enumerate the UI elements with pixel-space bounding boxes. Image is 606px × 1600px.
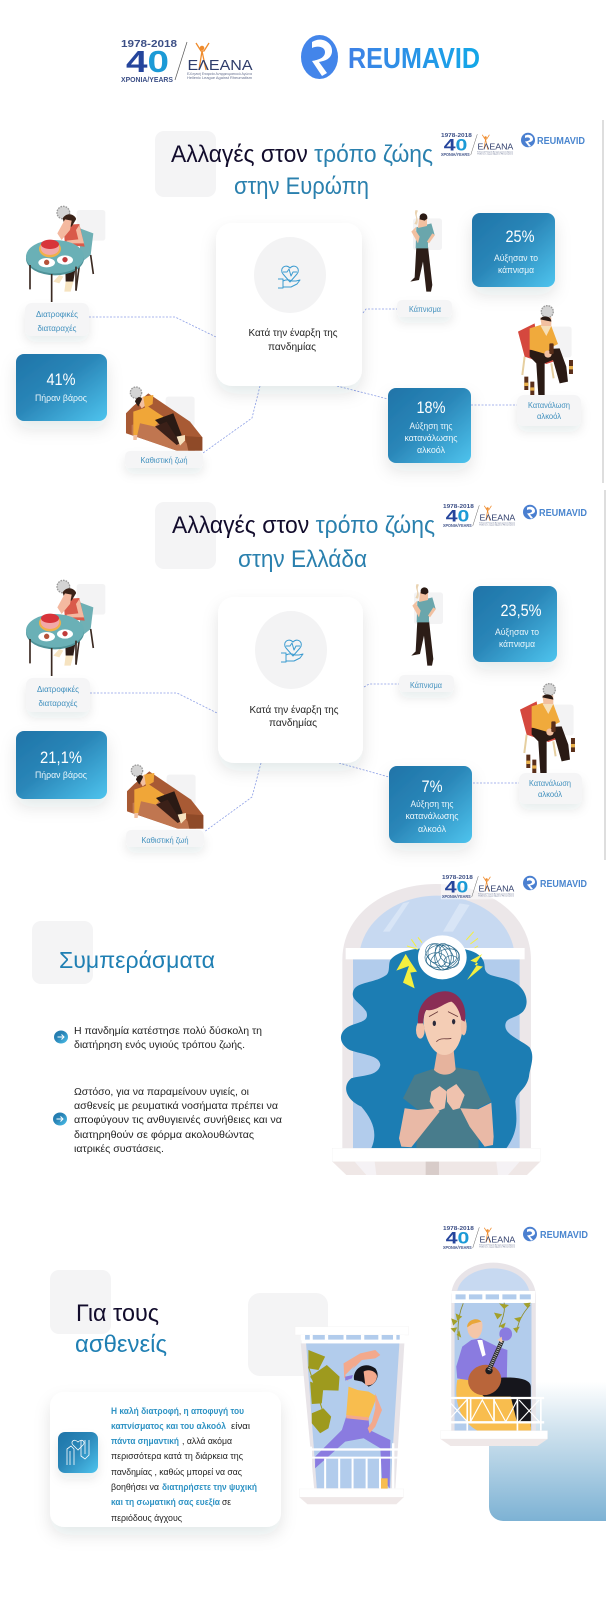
central card — [218, 597, 363, 763]
label: sedentary life: Καθιστική ζωή — [140, 456, 188, 465]
connector lines — [90, 684, 519, 832]
heading: for patients: Για τους — [76, 1300, 159, 1327]
stat: 18% more alcohol: Αύξηση της — [410, 421, 453, 431]
advice card: είναι — [231, 1421, 250, 1431]
label: sedentary life — [125, 451, 203, 468]
logo: REUMAVID small — [523, 876, 587, 890]
stat: 25% more smoking: 25% — [506, 227, 534, 246]
stat: 7% more alcohol: 7% — [422, 777, 442, 796]
label: smoking: Κάπνισμα — [409, 305, 441, 314]
icon: arrow bullet — [53, 1112, 67, 1126]
figure: man smoking — [411, 584, 443, 666]
connector lines — [89, 309, 517, 453]
illustration: woman exercising on balcony — [295, 1327, 409, 1504]
bullet two: Ωστόσο, για να παραμείνουν υγιείς, οι — [74, 1086, 250, 1098]
logo: ELEANA 40 years (header): ΧΡΟΝΙΑ/YEARS — [121, 75, 173, 84]
logo: ELEANA small — [441, 133, 514, 157]
stat: 21,1% gained weight: Πήραν βάρος — [35, 770, 88, 780]
central card — [216, 223, 362, 386]
heading: Greece title: Αλλαγές στον τρόπο ζώης — [172, 512, 435, 539]
stat: 7% more alcohol: κατανάλωσης — [406, 811, 459, 821]
logo: ELEANA small: Hellenic League Against Rheumatism — [479, 524, 516, 527]
logo: ELEANA small: Ελληνική Εταιρεία Αντιρρευματικού Αγώνα — [478, 892, 514, 895]
label: alcohol consumption — [517, 395, 581, 426]
advice card: Η καλή διατροφή, η αποφυγή του — [111, 1406, 244, 1416]
logo: ELEANA small: 1978-2018 — [442, 875, 473, 881]
bullet two: ασθενείς με ρευματικά νοσήματα πρέπει να — [74, 1100, 278, 1112]
logo: REUMAVID (header): REUMAVID — [348, 43, 480, 75]
logo: ELEANA small: Ελληνική Εταιρεία Αντιρρευματικού Αγώνα — [479, 521, 515, 524]
illustration: man playing guitar on balcony — [441, 1263, 548, 1446]
stat: 23,5% more smoking: κάπνισμα — [499, 639, 535, 649]
logo: ELEANA 40 years (header): Hellenic League Against Rheumatism — [187, 76, 252, 80]
icon: hands with heart — [58, 1432, 98, 1473]
label: alcohol consumption: αλκοόλ — [538, 790, 562, 799]
illustration: stressed man in window — [332, 884, 540, 1175]
icon: hand holding heart — [281, 640, 303, 662]
label: smoking — [397, 300, 452, 317]
stat: 41% gained weight: 41% — [46, 370, 76, 389]
panel: conclusions — [32, 873, 587, 1175]
label: dietary disturbances: διαταραχές — [38, 699, 78, 708]
label: alcohol consumption: Κατανάλωση — [529, 779, 571, 788]
stat: 18% more alcohol: κατανάλωσης — [404, 433, 458, 443]
label: dietary disturbances — [26, 678, 90, 712]
logo: REUMAVID (header) — [301, 35, 480, 79]
logo: ELEANA small: Ελληνική Εταιρεία Αντιρρευματικού Αγώνα — [477, 150, 513, 153]
label: smoking: Κάπνισμα — [410, 681, 442, 690]
figure: woman eating at table — [26, 206, 105, 302]
heading: for patients: ασθενείς — [75, 1331, 167, 1358]
label: alcohol consumption — [519, 773, 582, 804]
bullet one: διατήρηση ενός υγιούς τρόπου ζωής. — [74, 1039, 245, 1051]
advice card — [50, 1392, 281, 1527]
label: dietary disturbances — [25, 303, 89, 336]
advice card: περισσότερα κατά τη διάρκεια της — [111, 1451, 243, 1461]
figure: woman eating at table — [26, 580, 105, 676]
central card: Κατά την έναρξη της — [248, 327, 338, 339]
logo: ELEANA 40 years (header): 40 — [126, 44, 169, 79]
label: dietary disturbances: Διατροφικές — [36, 310, 78, 319]
figure: man on sofa — [127, 765, 203, 829]
logo: REUMAVID small: REUMAVID — [537, 136, 585, 147]
logo: ELEANA small: 40 — [446, 1229, 469, 1248]
logo: ELEANA small: 40 — [444, 136, 467, 155]
beanbag — [456, 1367, 531, 1431]
logo: ELEANA 40 years (header) — [121, 39, 252, 84]
heading: for patients — [50, 1270, 167, 1358]
stat: 7% more alcohol: Αύξηση της — [410, 799, 454, 809]
logo: ELEANA small: ΧΡΟΝΙΑ/YEARS — [442, 894, 471, 899]
railing — [300, 1443, 404, 1489]
panel: Europe — [16, 131, 585, 468]
stat: 25% more smoking: Αύξησαν το — [494, 253, 538, 263]
label: sedentary life — [126, 830, 204, 847]
advice card: , αλλά ακόμα — [182, 1436, 232, 1446]
logo: REUMAVID small — [521, 133, 585, 147]
logo: ELEANA small: ΕΛΕΑΝΑ — [479, 885, 515, 894]
stat: 18% more alcohol: αλκοόλ — [417, 445, 445, 455]
icon: hand holding heart — [278, 266, 300, 288]
label: dietary disturbances: Διατροφικές — [37, 685, 79, 694]
logo: REUMAVID small: REUMAVID — [540, 1230, 588, 1241]
logo: ELEANA 40 years (header): Ελληνική Εταιρεία Αντιρρευματικού Αγώνα — [187, 72, 252, 76]
logo: ELEANA small: ΧΡΟΝΙΑ/YEARS — [443, 1245, 472, 1250]
logo: ELEANA small: Hellenic League Against Rheumatism — [479, 1246, 516, 1249]
logo: ELEANA small: 40 — [446, 507, 469, 526]
logo: REUMAVID small: REUMAVID — [539, 508, 587, 519]
stat: 23,5% more smoking — [473, 586, 557, 662]
central card: πανδημίας — [269, 717, 317, 729]
stat: 23,5% more smoking: 23,5% — [500, 601, 542, 620]
logo: ELEANA small: ΕΛΕΑΝΑ — [480, 514, 516, 523]
bullet one: Η πανδημία κατέστησε πολύ δύσκολη τη — [74, 1025, 262, 1037]
sill — [332, 1148, 540, 1162]
logo: ELEANA small: ΧΡΟΝΙΑ/YEARS — [443, 523, 472, 528]
stat: 7% more alcohol: αλκοόλ — [418, 824, 446, 834]
central card: Κατά την έναρξη της — [250, 704, 338, 716]
bullet two: διατηρηθούν σε φόρμα ακολουθώντας — [74, 1129, 254, 1141]
man — [467, 1320, 482, 1339]
stat: 41% gained weight — [16, 354, 107, 421]
figure: man drinking alcohol — [518, 306, 573, 395]
stat: 7% more alcohol — [389, 766, 472, 843]
figure: man on sofa — [126, 387, 202, 451]
heading: conclusions: Συμπεράσματα — [59, 947, 215, 973]
logo: REUMAVID small — [523, 1227, 588, 1241]
vines — [458, 1303, 530, 1340]
heading: Greece title: στην Ελλάδα — [238, 546, 367, 573]
bullet two — [53, 1086, 282, 1155]
monstera — [308, 1350, 340, 1433]
logo: ELEANA small: 1978-2018 — [443, 504, 474, 510]
heading: Greece title — [155, 502, 435, 573]
panel: for patients — [50, 1226, 606, 1527]
logo: ELEANA 40 years (header): 1978-2018 — [121, 39, 178, 50]
central card: πανδημίας — [268, 341, 316, 353]
logo: ELEANA small: ΕΛΕΑΝΑ — [480, 1236, 516, 1245]
label: smoking — [399, 675, 454, 692]
railing — [442, 1398, 544, 1431]
advice card: διατηρήσετε την ψυχική — [162, 1482, 257, 1492]
advice card: πανδημίας , καθώς μπορεί να σας — [111, 1467, 242, 1477]
bullet one — [54, 1025, 262, 1051]
section divider line — [602, 120, 604, 483]
label: alcohol consumption: αλκοόλ — [537, 412, 561, 421]
heading: Europe title — [155, 131, 433, 200]
stat: 18% more alcohol: 18% — [416, 398, 446, 417]
label: alcohol consumption: Κατανάλωση — [528, 401, 570, 410]
advice card: βοηθήσει να — [111, 1482, 159, 1492]
advice card: σε — [222, 1497, 231, 1507]
gradient panel — [489, 1382, 606, 1521]
logo: ELEANA small — [443, 504, 516, 528]
logo: ELEANA small: Hellenic League Against Rheumatism — [477, 153, 514, 156]
heading: Europe title: Αλλαγές στον τρόπο ζώης — [171, 141, 433, 168]
icon: arrow bullet — [54, 1030, 68, 1044]
stat: 25% more smoking — [472, 213, 555, 287]
logo: ELEANA small: ΕΛΕΑΝΑ — [478, 143, 514, 152]
bullet two: ιατρικές συστάσεις. — [74, 1143, 164, 1155]
stat: 21,1% gained weight — [16, 731, 107, 799]
logo: REUMAVID small — [523, 505, 587, 519]
logo: REUMAVID small: REUMAVID — [540, 879, 587, 890]
logo: ELEANA 40 years (header): ΕΛΕΑΝΑ — [188, 57, 252, 74]
heading: conclusions — [32, 921, 215, 984]
logo: ELEANA small: Ελληνική Εταιρεία Αντιρρευματικού Αγώνα — [479, 1243, 515, 1246]
decorative panel: gray square — [248, 1293, 328, 1376]
advice card: και τη σωματική σας ευεξία — [111, 1497, 221, 1507]
label: sedentary life: Καθιστική ζωή — [142, 836, 188, 845]
guitar — [464, 1360, 506, 1400]
heading: Europe title: στην Ευρώπη — [234, 173, 369, 200]
logo: ELEANA small: 1978-2018 — [443, 1226, 474, 1232]
label: dietary disturbances: διαταραχές — [38, 324, 77, 333]
section divider line — [604, 490, 606, 860]
stat: 23,5% more smoking: Αύξησαν το — [495, 627, 539, 637]
panel: Greece — [16, 502, 587, 847]
stat: 21,1% gained weight: 21,1% — [40, 748, 82, 767]
shirt — [403, 1067, 491, 1148]
stat: 25% more smoking: κάπνισμα — [498, 265, 534, 275]
logo: ELEANA small: Hellenic League Against Rheumatism — [478, 895, 515, 898]
stat: 18% more alcohol — [388, 388, 471, 463]
stat: 41% gained weight: Πήραν βάρος — [35, 393, 88, 403]
logo: ELEANA small: ΧΡΟΝΙΑ/YEARS — [441, 152, 470, 157]
bullet two: αποφύγουν τις ανθυγιεινές συνήθειες και να — [74, 1114, 282, 1126]
advice card: πάντα σημαντική — [111, 1436, 179, 1446]
logo: ELEANA small: 1978-2018 — [441, 133, 472, 139]
figure: man drinking alcohol — [520, 684, 575, 773]
logo: ELEANA small — [441, 873, 516, 899]
logo: ELEANA small: 40 — [445, 878, 468, 897]
advice card: καπνίσματος και του αλκοόλ — [111, 1421, 226, 1431]
advice card: περιόδους άγχους — [111, 1513, 182, 1523]
woman — [344, 1350, 380, 1382]
figure: man smoking — [410, 210, 442, 292]
logo: ELEANA small — [443, 1226, 516, 1250]
